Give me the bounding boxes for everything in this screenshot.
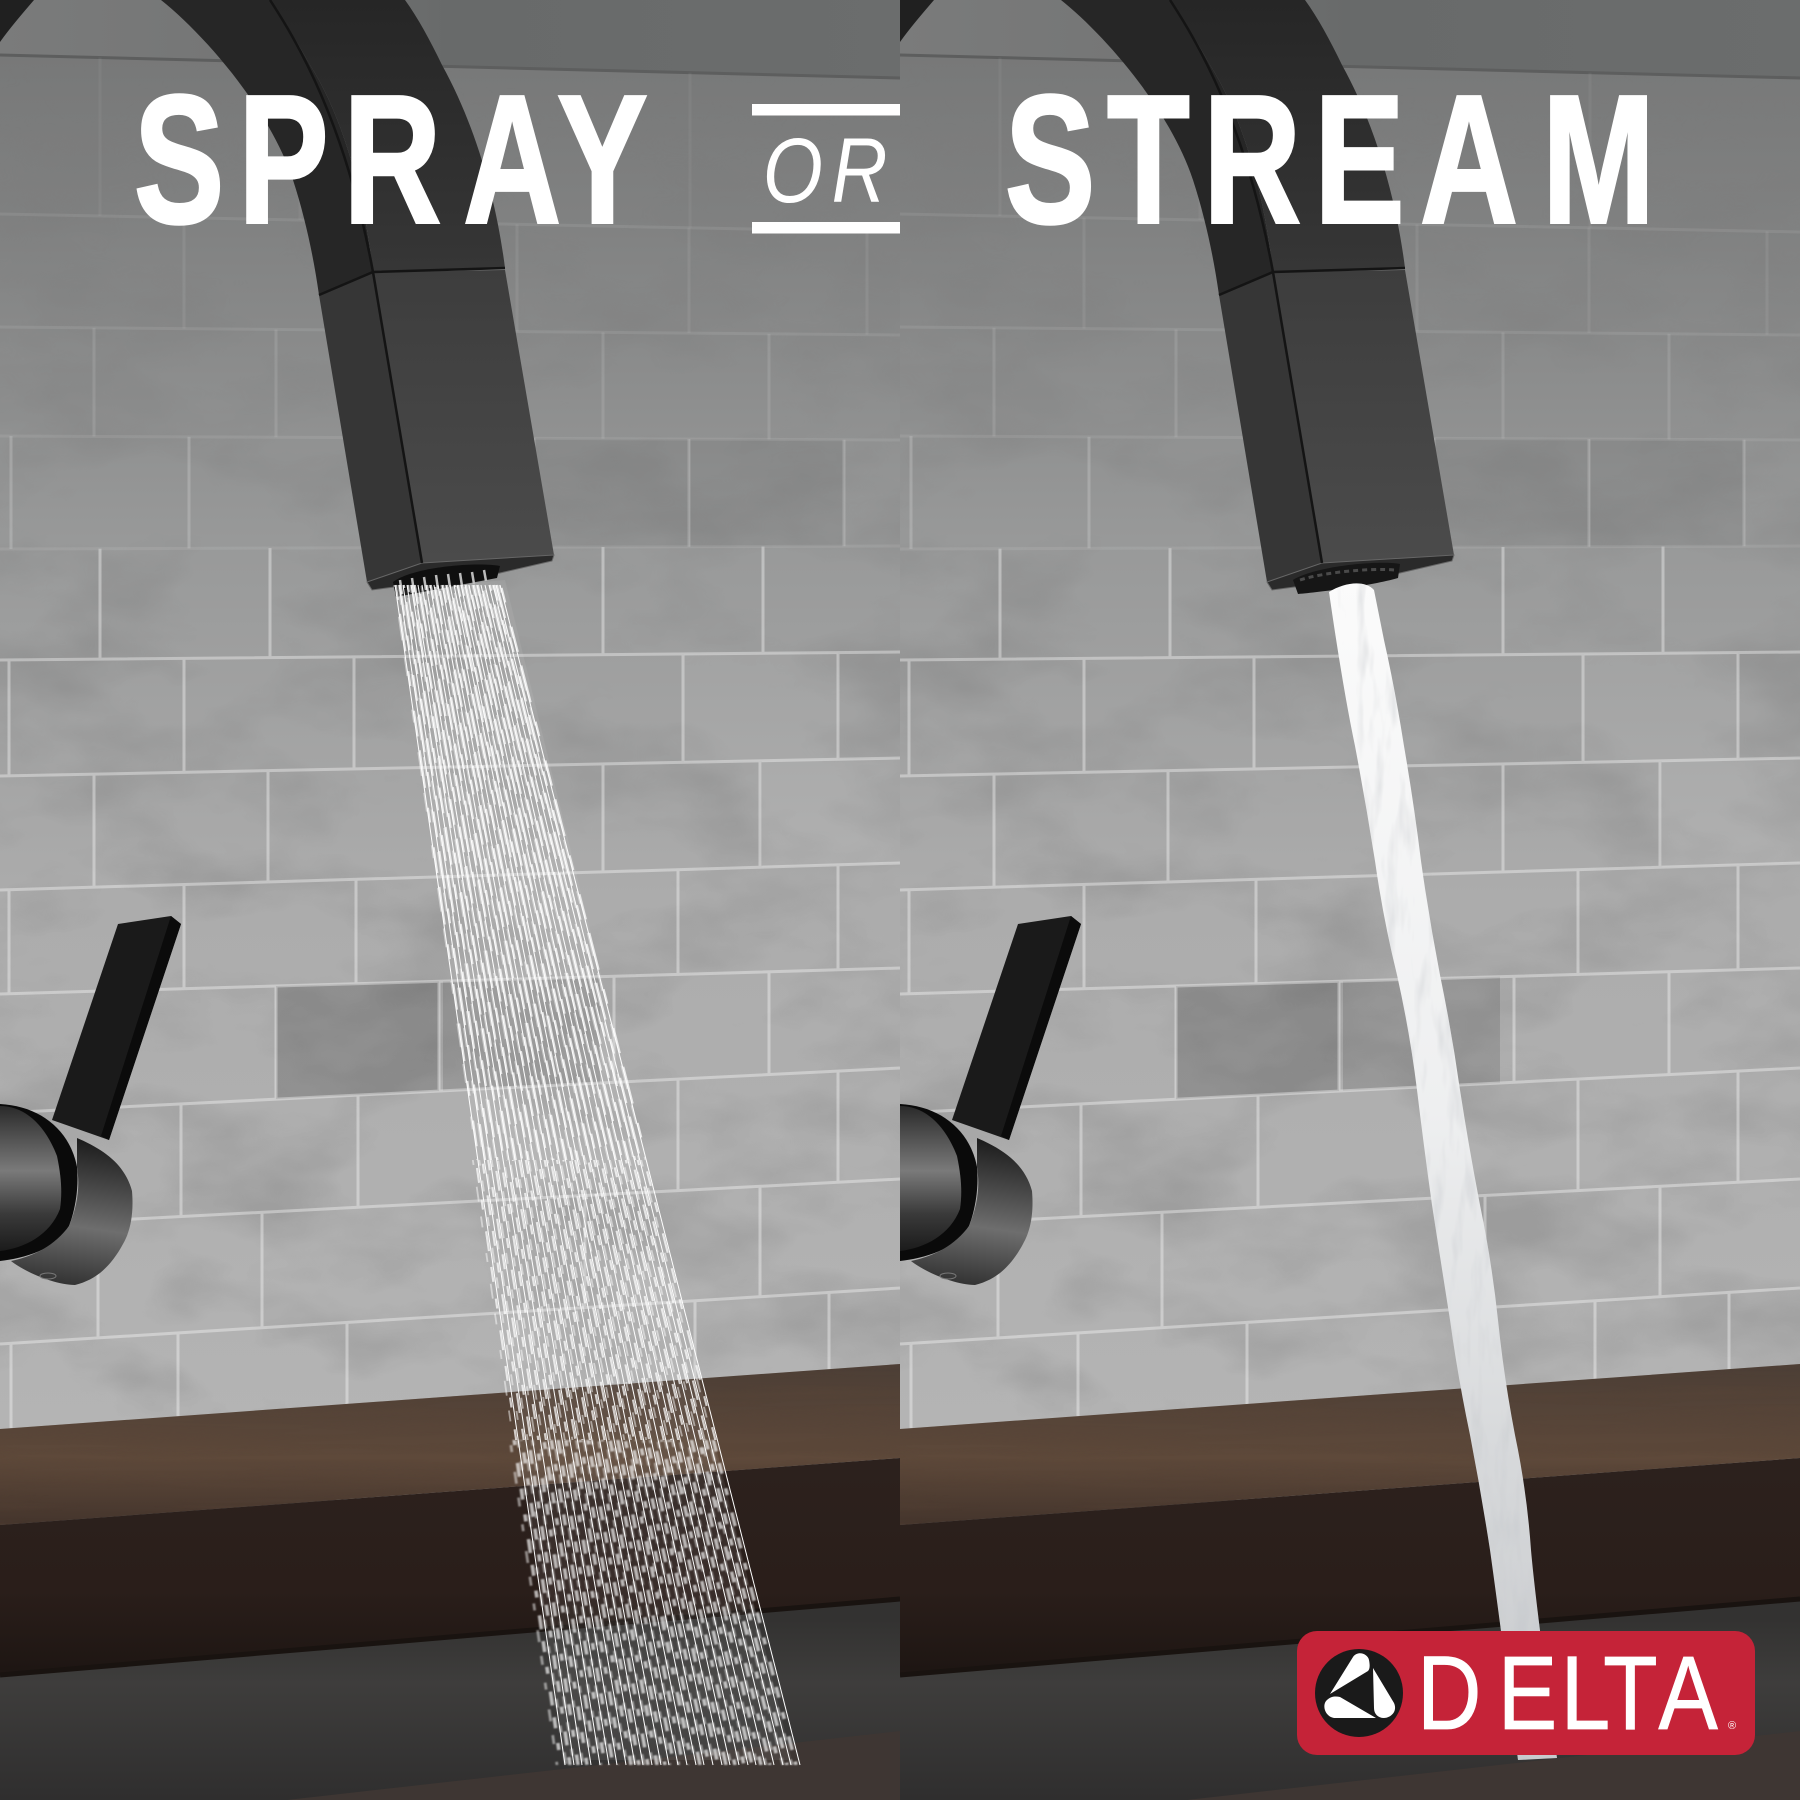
icon: Delta triangle mark [1315, 1649, 1403, 1737]
title: OR divider [752, 104, 900, 234]
wood countertop [0, 1350, 900, 1800]
faucet lever handle and hub [0, 916, 181, 1285]
logo: Delta badge: ® [1728, 1720, 1736, 1732]
logo: Delta badge [1297, 1631, 1755, 1755]
icon: spray aerator [393, 565, 500, 597]
marble tile wall [0, 0, 900, 1500]
panel: spray scene (wall, counter, faucet) [0, 0, 900, 1800]
faucet spout [0, 0, 554, 590]
logo: Delta badge: DELTA [1417, 1634, 1718, 1752]
water stream [1329, 583, 1557, 1760]
title: STREAM: STREAM [1005, 58, 1655, 262]
title: SPRAY: SPRAY [134, 58, 648, 262]
panel: stream scene (wall, counter, faucet) [900, 0, 1800, 1800]
icon: stream aerator [1293, 563, 1400, 594]
water: spray streaks [387, 580, 801, 1765]
title: OR divider: OR [763, 120, 887, 223]
